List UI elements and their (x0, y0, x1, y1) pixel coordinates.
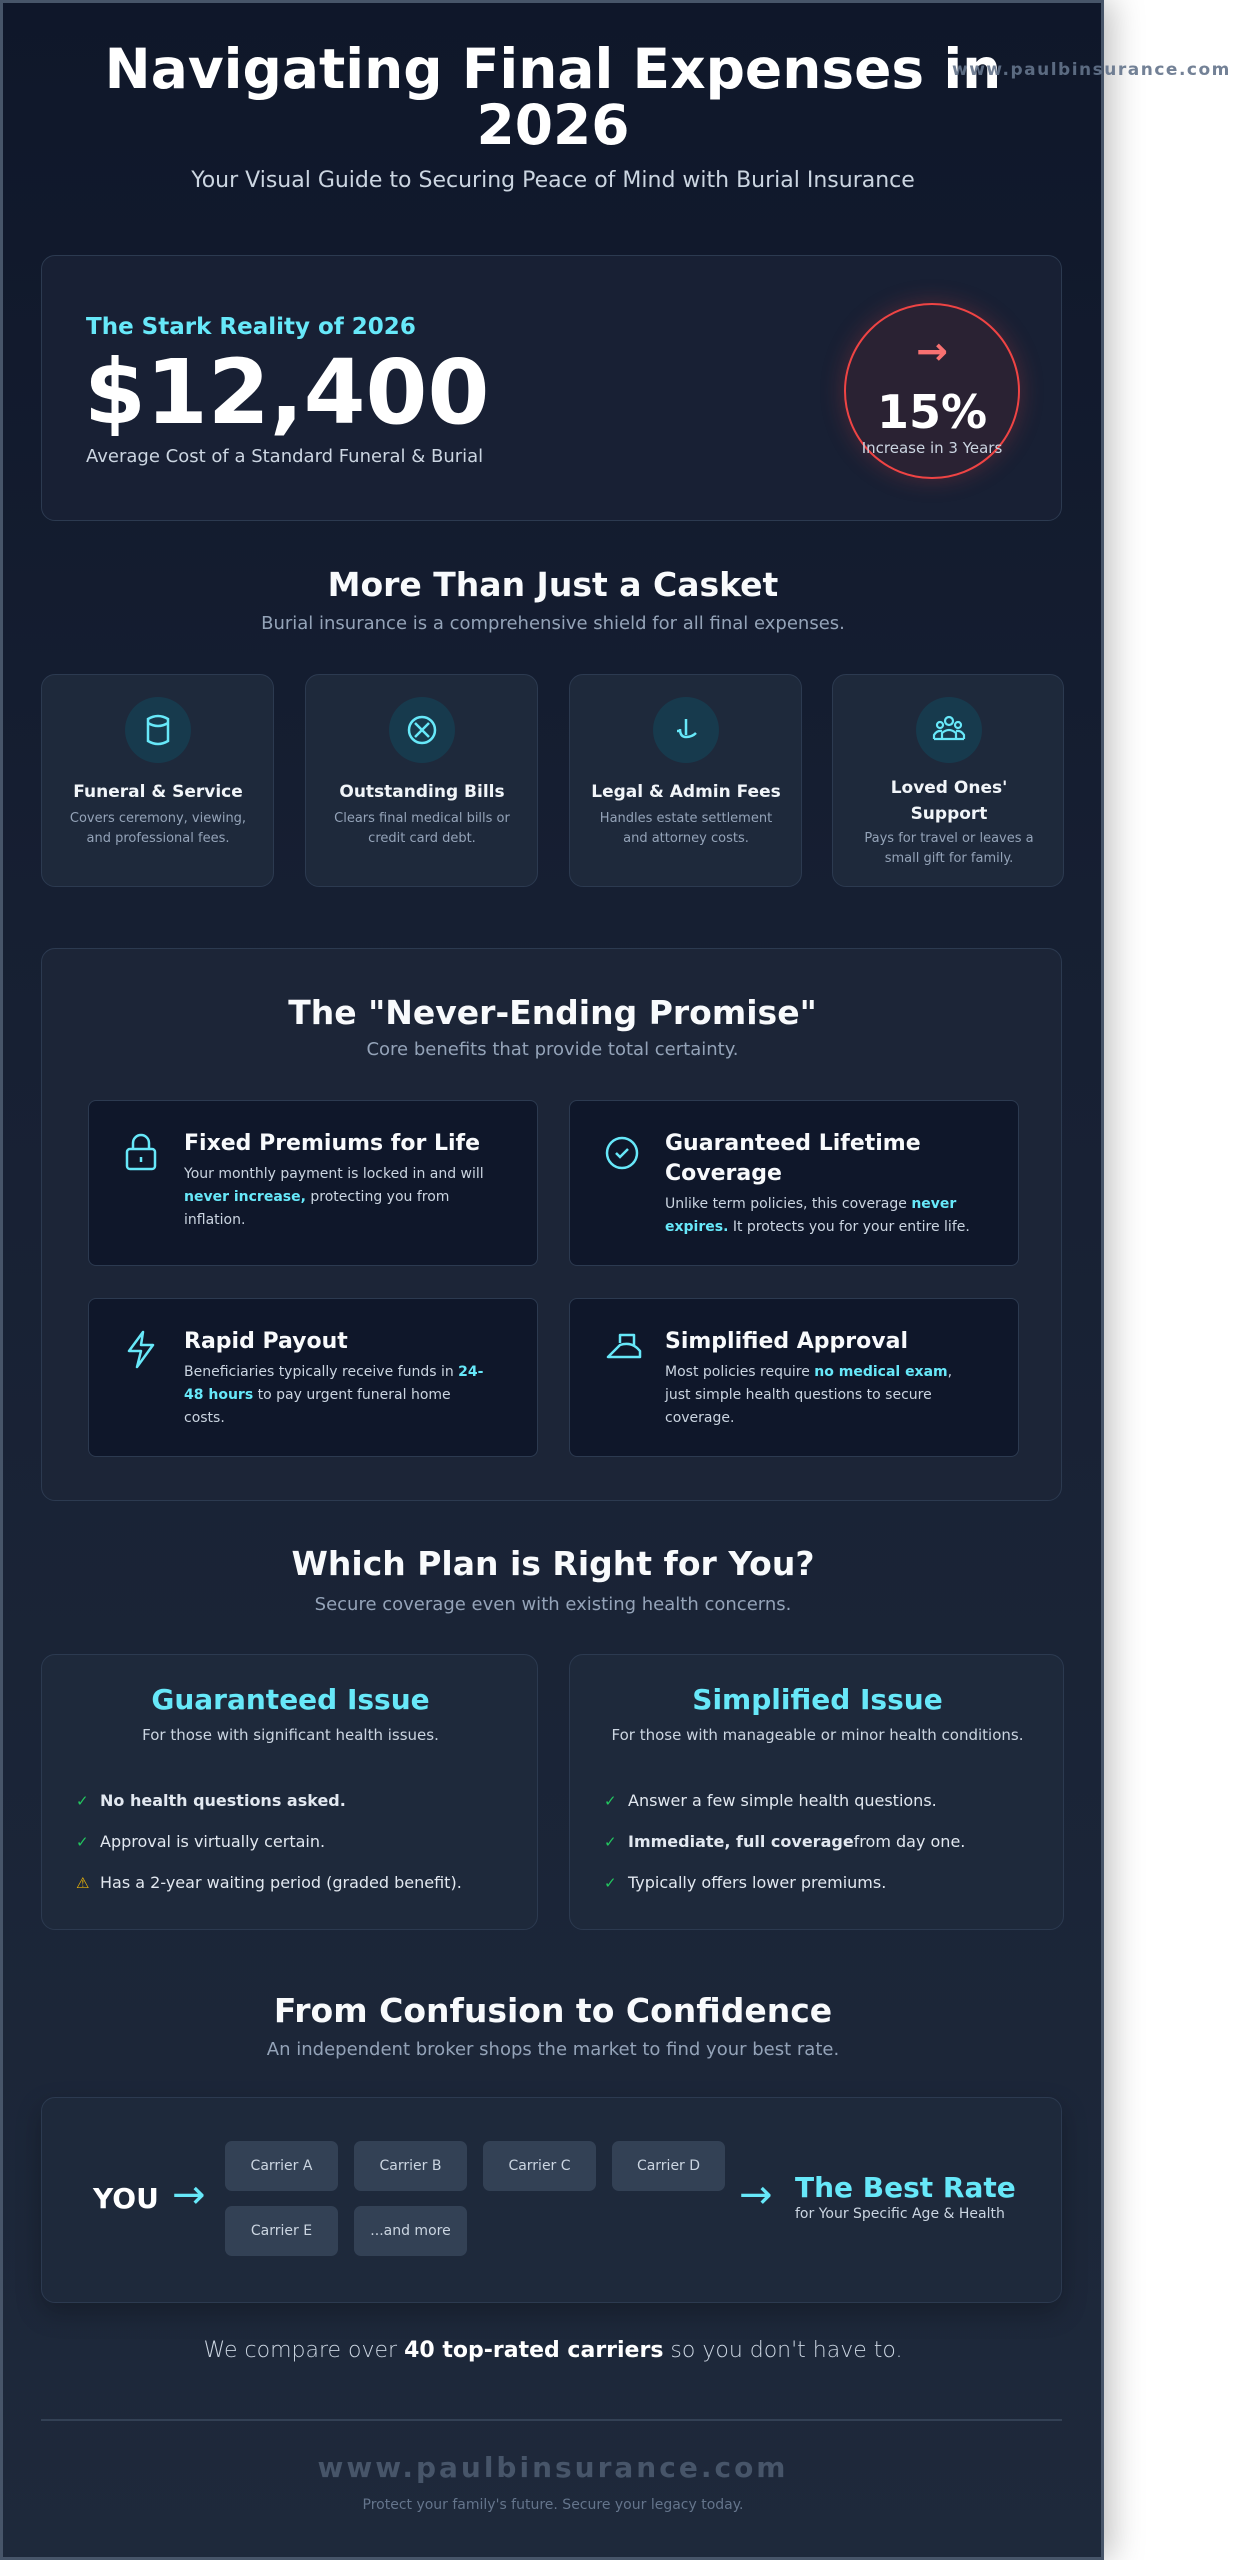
heading: The "Never-Ending Promise" (288, 993, 817, 1032)
text: Your monthly payment is locked in and will never increase, protecting you from inflation. (184, 1166, 484, 1228)
plan desc: For those with significant health issues. (142, 1726, 439, 1744)
subtitle: Your Visual Guide to Securing Peace of Mind with Burial Insurance (191, 168, 915, 193)
icon: lightning (128, 1330, 154, 1368)
text: Clears final medical bills or credit card debt. (334, 811, 510, 846)
list: ⚠ (76, 1874, 89, 1892)
list (76, 1791, 462, 1892)
text (70, 782, 246, 846)
text: Unlike term policies, this coverage never expires. It protects you for your entire life. (665, 1196, 970, 1235)
list: ✓ (76, 1792, 89, 1810)
stat value: 15% (877, 385, 987, 439)
list: Has a 2-year waiting period (graded benefit). (100, 1873, 462, 1892)
heading: plans: Which Plan is Right for You? (291, 1544, 814, 1583)
text: Covers ceremony, viewing, and professional fees. (70, 811, 246, 846)
list: ✓ (604, 1874, 617, 1892)
text (334, 782, 510, 846)
panel: broker flow (41, 2097, 1062, 2303)
text (184, 1329, 483, 1426)
text: Rapid Payout (184, 1329, 348, 1354)
hero caption: Average Cost of a Standard Funeral & Burial (86, 446, 483, 467)
benefit: fixed premiums (88, 1100, 538, 1266)
benefit: lifetime coverage (569, 1100, 1019, 1266)
plan title: Guaranteed Issue (151, 1683, 430, 1716)
title (105, 37, 1001, 157)
carriers: Carrier A (251, 2158, 312, 2174)
icon: legal (653, 697, 719, 763)
stat circle (844, 303, 1020, 479)
card: funeral (41, 674, 274, 887)
text: Beneficiaries typically receive funds in 24-48 hours to pay urgent funeral home costs. (184, 1364, 483, 1426)
icon: lock (126, 1134, 156, 1170)
panel: stark reality (41, 255, 1062, 521)
list (604, 1791, 965, 1892)
plan: simplified issue (569, 1654, 1064, 1930)
carriers: Carrier B (380, 2158, 441, 2174)
best rate: for Your Specific Age & Health (795, 2206, 1005, 2222)
you label: YOU (93, 2182, 159, 2215)
footer url: www.paulbinsurance.com (318, 2451, 788, 2484)
text (864, 778, 1034, 866)
title: 2026 (476, 93, 630, 157)
text: Legal & Admin Fees (591, 782, 781, 802)
icon: bills (389, 697, 455, 763)
stat label: Increase in 3 Years (862, 439, 1002, 457)
subheading: Secure coverage even with existing health concerns. (315, 1594, 791, 1615)
text (184, 1131, 484, 1228)
benefit: simplified approval (569, 1298, 1019, 1457)
text (664, 1329, 952, 1426)
subheading: Core benefits that provide total certainty. (366, 1039, 739, 1060)
icon: casket (125, 697, 191, 763)
card: loved ones (832, 674, 1064, 887)
text: Handles estate settlement and attorney costs. (600, 811, 772, 846)
carriers: ...and more (370, 2223, 451, 2239)
list: ✓ (76, 1833, 89, 1851)
subheading: An independent broker shops the market to find your best rate. (267, 2039, 839, 2060)
list: Answer a few simple health questions. (628, 1791, 937, 1810)
list: Approval is virtually certain. (100, 1832, 325, 1851)
plan title: Simplified Issue (692, 1683, 943, 1716)
text: Simplified Approval (665, 1329, 908, 1354)
big number: $12,400 (84, 340, 489, 444)
carriers: Carrier D (637, 2158, 700, 2174)
text: Loved Ones' Support (891, 778, 1007, 824)
plan desc: For those with manageable or minor health conditions. (611, 1726, 1024, 1744)
carriers: Carrier E (251, 2223, 312, 2239)
icon: arrow: → (916, 329, 948, 373)
text: Guaranteed Lifetime Coverage (665, 1131, 921, 1186)
icon: family (916, 697, 982, 763)
list: ✓ (604, 1792, 617, 1810)
plan: guaranteed issue (41, 1654, 538, 1930)
text: Fixed Premiums for Life (184, 1131, 480, 1156)
list: No health questions asked. (100, 1791, 346, 1810)
title: Navigating Final Expenses in (105, 37, 1001, 101)
subheading: Burial insurance is a comprehensive shield for all final expenses. (261, 613, 845, 634)
footer tagline: Protect your family's future. Secure your legacy today. (362, 2497, 743, 2513)
text: Most policies require no medical exam, just simple health questions to secure coverage. (665, 1364, 952, 1426)
benefit: rapid payout (88, 1298, 538, 1457)
arrow: → (172, 2172, 206, 2218)
heading: casket: More Than Just a Casket (328, 565, 778, 604)
heading: confidence: From Confusion to Confidence (274, 1991, 832, 2030)
best rate: The Best Rate (795, 2171, 1016, 2204)
text: Funeral & Service (73, 782, 243, 802)
watermark: www.paulbinsurance.com (952, 60, 1231, 80)
carriers: Carrier C (508, 2158, 571, 2174)
icon: hand (606, 1334, 642, 1358)
panel: never-ending promise (41, 948, 1062, 1501)
text (591, 782, 781, 846)
text: Pays for travel or leaves a small gift for family. (864, 831, 1034, 866)
list: Immediate, full coveragefrom day one. (628, 1832, 965, 1851)
list: Typically offers lower premiums. (628, 1873, 886, 1892)
card: bills (305, 674, 538, 887)
arrow: → (739, 2172, 773, 2218)
compare text: We compare over 40 top-rated carriers so you don't have to. (204, 2338, 902, 2363)
icon: check circle (606, 1136, 638, 1170)
divider (41, 2419, 1062, 2421)
carriers (225, 2141, 725, 2256)
hero label: The Stark Reality of 2026 (86, 314, 416, 340)
card: legal (569, 674, 802, 887)
text: Outstanding Bills (339, 782, 505, 802)
text (665, 1131, 970, 1235)
list: ✓ (604, 1833, 617, 1851)
best rate (795, 2171, 1016, 2222)
